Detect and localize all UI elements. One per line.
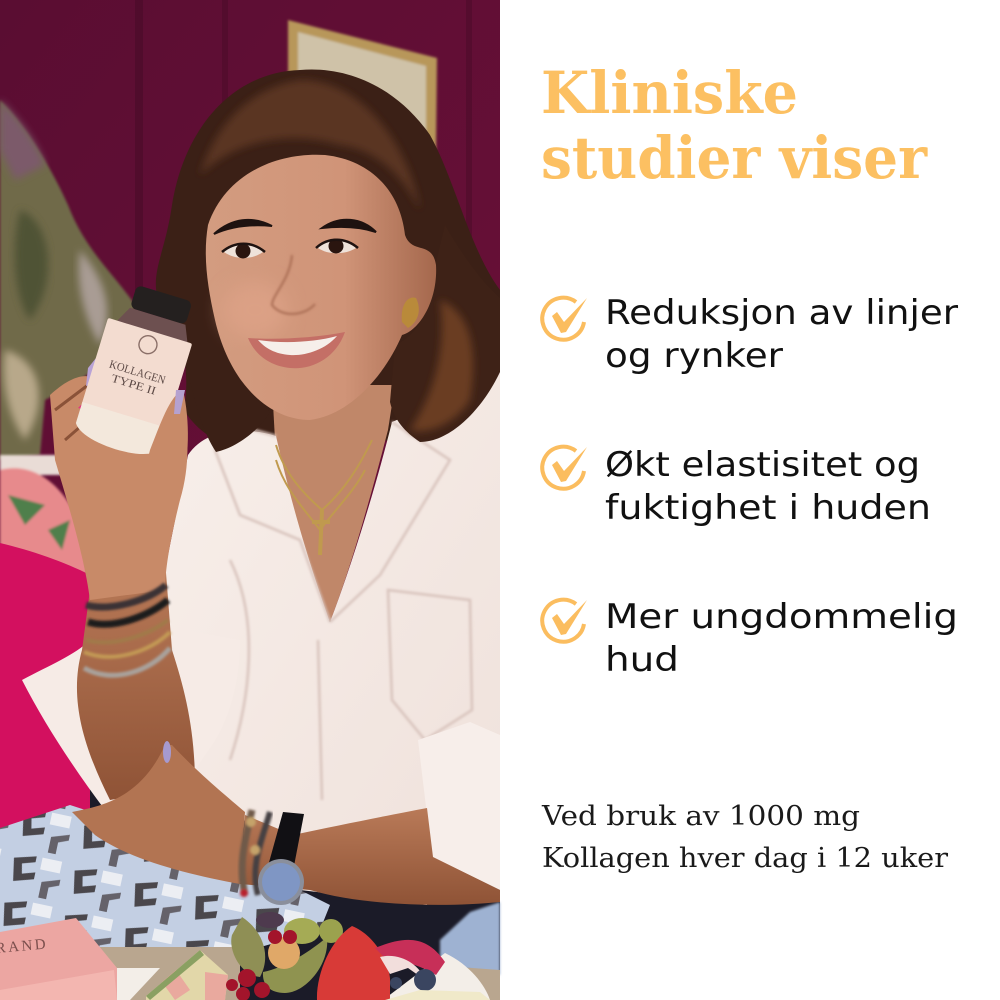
heading line 2: studier viser xyxy=(541,124,928,192)
logo on label xyxy=(137,333,159,356)
white fruit pieces xyxy=(385,990,490,1000)
left hand xyxy=(50,376,187,600)
wall: burgundy panels xyxy=(0,0,500,620)
bracelets xyxy=(84,585,170,675)
physalis leaves xyxy=(231,917,265,977)
dark plum xyxy=(256,912,284,928)
thumb xyxy=(140,390,188,490)
benefit 3 xyxy=(542,597,958,680)
check icon xyxy=(542,447,587,489)
dosage note: Ved bruk av 1000 mg xyxy=(541,801,860,832)
hair highlights xyxy=(200,80,420,210)
patterned trousers xyxy=(0,805,330,950)
benefit 3 text: Mer ungdommelig xyxy=(605,597,958,637)
hair front right xyxy=(390,225,500,442)
heading line 1: Kliniske xyxy=(541,59,798,127)
strawberry xyxy=(317,926,390,1000)
right hand over elbow xyxy=(72,745,245,884)
check icon xyxy=(542,600,587,642)
bottle label xyxy=(81,318,192,432)
wristband bracelets xyxy=(240,810,270,897)
hair lock right xyxy=(410,300,473,431)
dosage note: Kollagen hver dag i 12 uker xyxy=(542,843,948,874)
blue fabric corner xyxy=(440,902,500,975)
patterned dress form xyxy=(0,100,135,460)
floral cushion xyxy=(0,455,88,575)
bottle shoulder xyxy=(112,304,195,350)
picture frame xyxy=(288,20,437,150)
shirt tail right xyxy=(418,722,500,890)
benefit 3 text xyxy=(605,597,958,680)
benefit 2 text: fuktighet i huden xyxy=(605,488,931,528)
hot pink cushion xyxy=(0,543,90,830)
dosage note xyxy=(541,801,948,874)
blueberries xyxy=(390,969,436,991)
pink gift box xyxy=(0,918,117,1000)
thumb nail xyxy=(174,390,185,414)
necklace xyxy=(276,440,372,555)
fruit platter xyxy=(146,912,490,1000)
benefit 2 text xyxy=(605,445,931,528)
collagen bottle: TYPE II xyxy=(110,373,157,398)
hand nail xyxy=(163,741,171,763)
photo: woman holding collagen bottle xyxy=(0,0,500,1000)
benefit 3 text: hud xyxy=(605,640,679,680)
benefit 1 text: Reduksjon av linjer xyxy=(605,293,958,333)
wristwatch xyxy=(258,812,304,905)
face xyxy=(206,155,436,420)
right eye xyxy=(316,238,358,254)
hair front left lock xyxy=(178,295,270,452)
shirt xyxy=(165,370,500,905)
red currants xyxy=(226,930,297,1000)
heading xyxy=(541,59,928,192)
dragon fruit xyxy=(375,940,445,975)
hair xyxy=(156,69,500,452)
right forearm xyxy=(240,808,500,905)
neck and chest xyxy=(272,385,395,622)
grapes xyxy=(284,918,320,944)
left eye xyxy=(222,244,265,258)
melon slices xyxy=(146,950,228,1000)
rolled sleeve xyxy=(22,630,240,810)
benefit 1 xyxy=(542,293,958,376)
grape xyxy=(319,919,343,943)
earring xyxy=(402,297,419,328)
fingers and nails xyxy=(55,358,96,440)
orange physalis xyxy=(268,937,300,969)
collagen bottle xyxy=(72,280,204,462)
right eyebrow xyxy=(322,220,376,232)
bottle capsules xyxy=(72,402,166,462)
left eyebrow xyxy=(214,220,272,234)
white plate xyxy=(115,953,490,1000)
table surface xyxy=(100,947,500,1000)
cheek shading xyxy=(223,282,287,338)
shirt collar and folds xyxy=(215,422,472,800)
smile xyxy=(248,332,345,368)
benefit 2 xyxy=(542,445,931,528)
benefit 1 text: og rynker xyxy=(605,336,783,376)
forearm holding bottle xyxy=(77,560,195,800)
benefit 2 text: Økt elastisitet og xyxy=(605,445,920,485)
photo base xyxy=(0,0,500,1000)
label text: KOLLAGEN xyxy=(108,359,167,387)
nose xyxy=(272,255,315,314)
bottle cap xyxy=(130,285,192,325)
check icon xyxy=(542,298,587,340)
benefit 1 text xyxy=(605,293,958,376)
